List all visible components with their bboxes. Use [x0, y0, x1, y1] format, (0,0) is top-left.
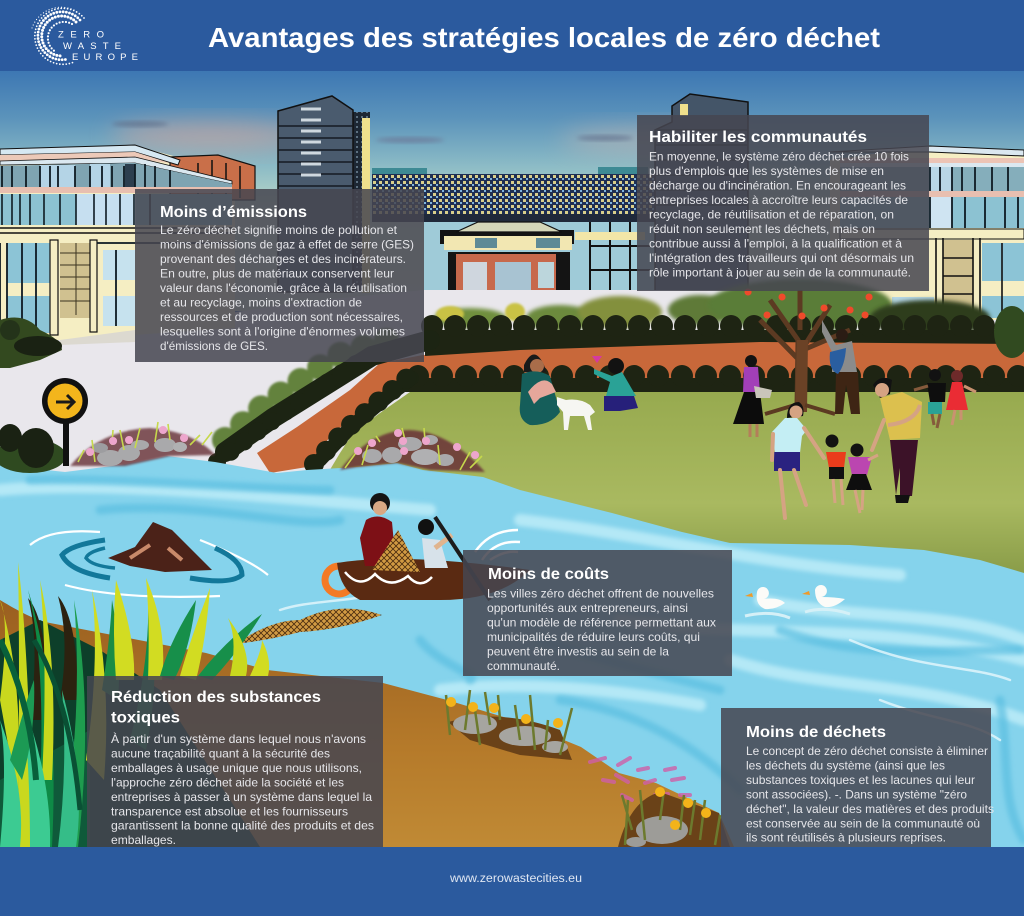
- body text: moins d'émissions de gaz à effet de serre (GES): [160, 238, 414, 252]
- body text: [649, 150, 914, 280]
- central pavilion: [440, 222, 574, 290]
- body text: ils sont réutilisés à plusieurs reprises.: [746, 831, 946, 845]
- heading: Réduction des substances: [111, 689, 321, 706]
- body text: et au recyclage, moins d'extraction de: [160, 296, 362, 310]
- website: www.zerowastecities.eu: [449, 873, 582, 885]
- body text: les déchets du système (ainsi que les: [746, 758, 945, 772]
- body text: [746, 744, 994, 845]
- body text: opportunités aux entrepreneurs, ainsi: [487, 601, 688, 615]
- logo: Zero Waste Europe: WASTE: [63, 41, 121, 52]
- woman in light blue: [772, 402, 824, 518]
- heading: toxiques: [111, 710, 180, 727]
- panel: Réduction des substances toxiques: [87, 676, 383, 847]
- body text: [160, 223, 414, 353]
- building: left glass block: [0, 145, 255, 345]
- body text: emballages.: [111, 833, 176, 847]
- header bar: [0, 0, 1024, 71]
- body text: À partir d'un système dans lequel nous n'avons: [111, 731, 366, 746]
- body text: En moyenne, le système zéro déchet crée 10 fois: [649, 150, 909, 164]
- child in pink: [846, 444, 878, 513]
- logo: Zero Waste Europe: EUROPE: [72, 52, 138, 63]
- body text: valeur dans l'économie, grâce à la réutilisation: [160, 281, 407, 295]
- body text: déchet", la valeur des matières et des produits: [746, 802, 994, 816]
- heading: Moins de coûts: [488, 566, 609, 583]
- child in red: [826, 434, 846, 505]
- body text: garantissent la bonne qualité des produits et des: [111, 819, 374, 833]
- heading: Moins d’émissions: [160, 204, 307, 221]
- hedge: front row: [405, 376, 1024, 392]
- central grid building: [372, 167, 662, 292]
- body text: l'intégration des travailleurs qui ont désormais un: [649, 251, 914, 265]
- body text: Le concept de zéro déchet consiste à éliminer: [746, 744, 988, 758]
- body text: municipalités de réduire leurs coûts, qui: [487, 630, 700, 644]
- body text: aucune traçabilité quant à la sécurité des: [111, 746, 330, 760]
- body text: est conservée au sein de la communauté où: [746, 816, 980, 830]
- body text: substances toxiques et les lacunes qui leur: [746, 773, 975, 787]
- bush top left: [0, 318, 62, 368]
- buildings: city centre: [278, 94, 748, 293]
- title: Avantages des stratégies locales de zéro déchet: [208, 22, 880, 53]
- body text: transparence est absolue et les fournisseurs: [111, 804, 348, 818]
- body text: emballages à usage unique que nous utilisons,: [111, 761, 362, 775]
- pink fish: [590, 758, 690, 805]
- body text: [111, 731, 374, 847]
- hedge: diagonal upper: [217, 340, 430, 462]
- body text: contribue aussi à l'emploi, à la qualification et à: [649, 237, 902, 251]
- body text: lesquelles sont à l'origine d'énormes volumes: [160, 324, 405, 338]
- building: right glass block: [830, 146, 1024, 320]
- body text: peuvent être investis au sein de la: [487, 645, 669, 659]
- green field: [325, 385, 1024, 600]
- heading: [111, 689, 321, 727]
- body text: provenant des décharges et des incinérateurs.: [160, 252, 406, 266]
- body text: [487, 587, 716, 673]
- brown river bank: [0, 600, 734, 847]
- left bush: [0, 424, 66, 473]
- flower mound left: [70, 422, 215, 466]
- logo dotted ring: [32, 7, 84, 64]
- body text: recyclage, de réutilisation et de réparation, on: [649, 208, 894, 222]
- ground: pale courtyard: [0, 290, 1024, 480]
- body text: d'émissions de GES.: [160, 339, 268, 353]
- boat with two people: [325, 493, 530, 600]
- orange path: [257, 338, 1024, 473]
- panel: Moins d'émissions: [135, 189, 424, 362]
- body text: plus d'emplois que les systèmes de mise en: [649, 164, 884, 178]
- footer bar: [0, 847, 1024, 916]
- body text: qu'un modèle de référence permettant aux: [487, 616, 716, 630]
- body text: communauté.: [487, 659, 560, 673]
- panel: Moins de déchets: [721, 708, 994, 847]
- tree with red fruit: [748, 290, 869, 414]
- woman with piglet: [520, 354, 560, 425]
- flowers and stones centre bank: [446, 690, 572, 760]
- body text: sont associées). -. Dans un système "zéro: [746, 787, 967, 801]
- body text: ressources et de production sont nécessaires,: [160, 310, 403, 324]
- right tower: [655, 94, 748, 292]
- body text: décharge ou d'incinération. En encourageant les: [649, 179, 906, 193]
- man in yellow: [872, 378, 922, 503]
- reeds: [0, 562, 269, 847]
- hedge: back row: [425, 279, 1024, 358]
- body text: Les villes zéro déchet offrent de nouvelles: [487, 587, 714, 601]
- running children: [914, 369, 976, 428]
- flower mound centre: [340, 428, 485, 472]
- fishing net: [236, 609, 382, 644]
- body text: entreprises locales à accroître leurs capacités de: [649, 193, 908, 207]
- man picking fruit: [822, 320, 860, 414]
- body text: réduit non seulement les déchets, mais on: [649, 222, 875, 236]
- logo: Zero Waste Europe: [32, 7, 138, 64]
- panel: Habiliter les communautés: [637, 115, 929, 291]
- woman in black skirt with basket: [733, 355, 772, 437]
- body text: Le zéro déchet signifie moins de pollution et: [160, 223, 398, 237]
- logo: Zero Waste Europe: ZERO: [58, 30, 104, 40]
- hedge: diagonal lower: [314, 374, 412, 464]
- white ducks: [745, 585, 850, 618]
- river: [0, 456, 1024, 847]
- brown mound in river: [30, 522, 268, 597]
- sky: [0, 71, 1024, 311]
- icon: directional sign: [42, 378, 88, 466]
- body text: En outre, plus de matériaux conservent leur: [160, 266, 394, 280]
- heading: Habiliter les communautés: [649, 129, 867, 146]
- kneeling person: [592, 356, 638, 411]
- body text: l'approche zéro déchet aide la société et les: [111, 775, 344, 789]
- panel: Moins de coûts: [463, 550, 732, 676]
- flowers and stones right bank: [618, 790, 730, 847]
- left tower: [278, 96, 370, 293]
- white lamb: [557, 397, 595, 430]
- heading: Moins de déchets: [746, 724, 886, 741]
- body text: rôle important à jouer au sein de la communauté.: [649, 266, 911, 280]
- body text: entreprises à passer à un système dans lequel la: [111, 790, 372, 804]
